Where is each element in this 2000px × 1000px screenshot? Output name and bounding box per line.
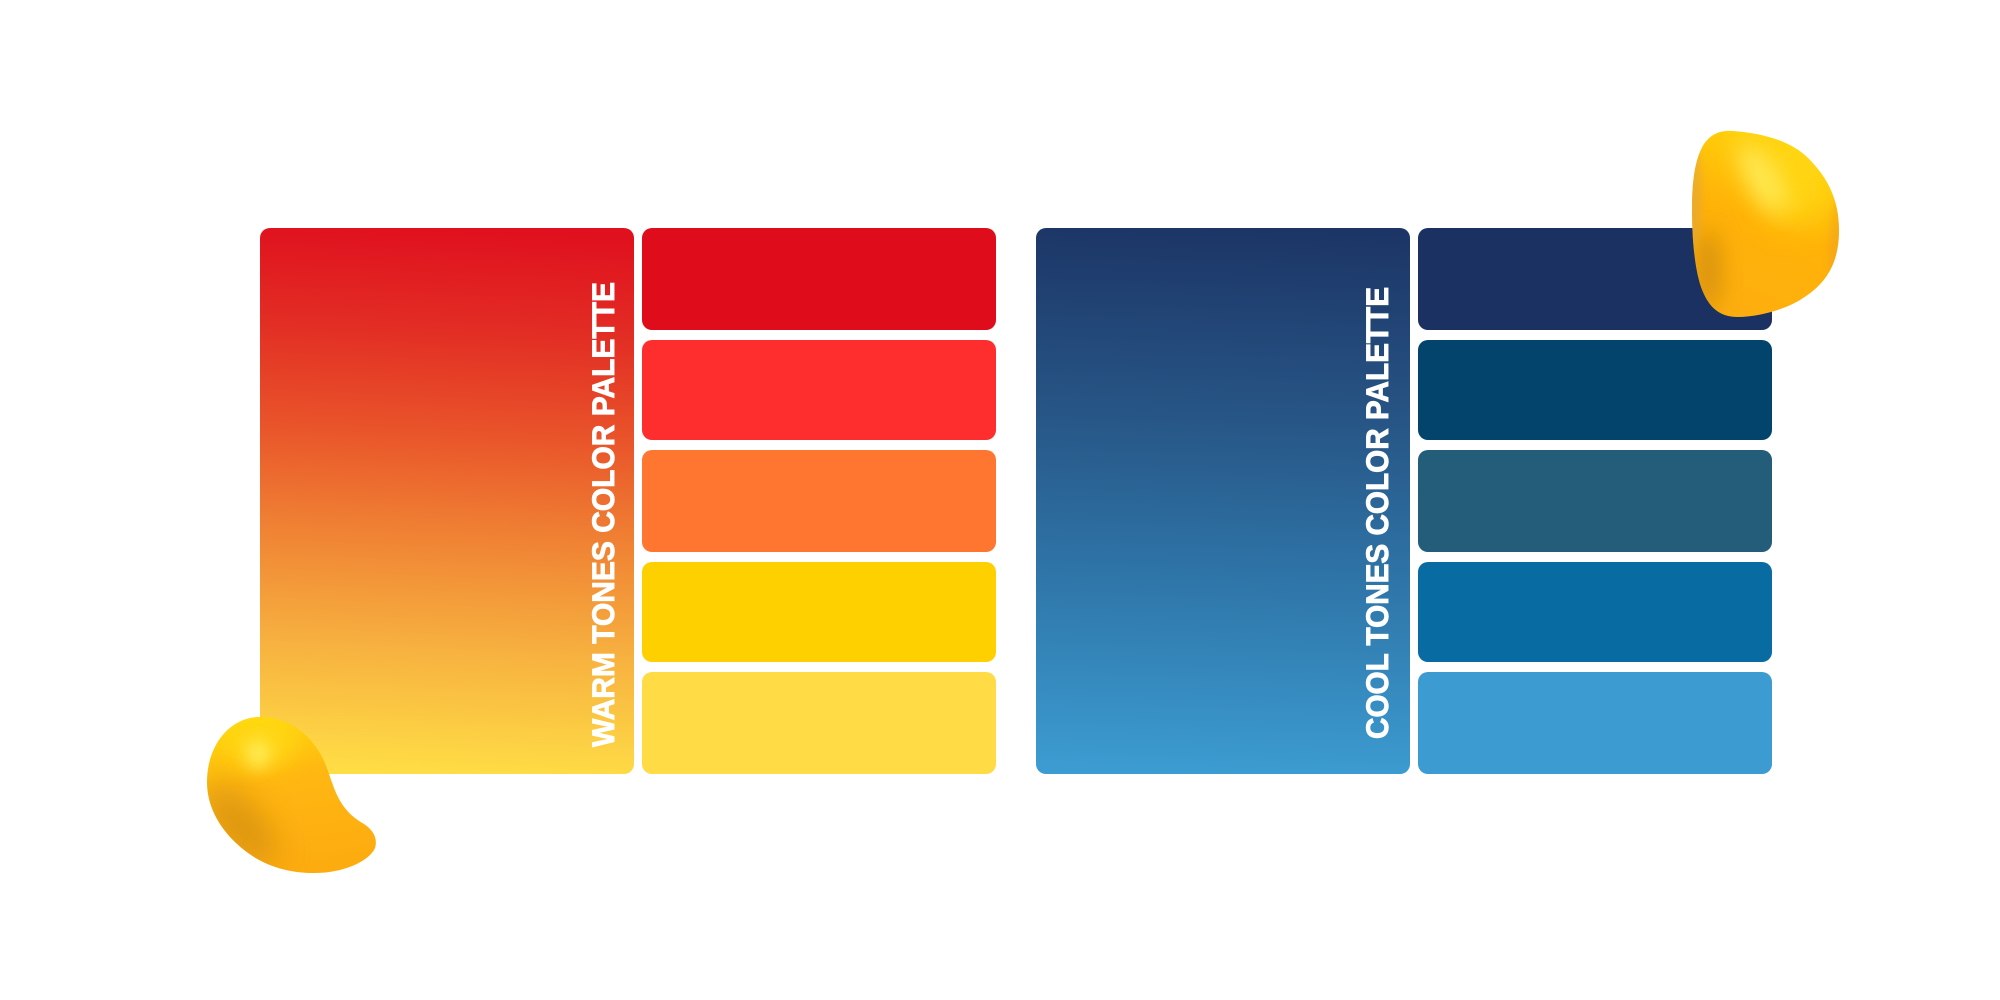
- swatch: sky blue: [1418, 672, 1772, 774]
- swatch: amber: [642, 562, 996, 662]
- swatch: bright red: [642, 340, 996, 440]
- heading: cool tones color palette: COOL TONES COLOR PALETTE: [1359, 287, 1395, 739]
- icon: yellow 3D droplet blob: [207, 717, 376, 873]
- swatch: slate teal: [1418, 450, 1772, 552]
- panel: warm tones gradient: [260, 228, 634, 774]
- swatch: ocean blue: [1418, 562, 1772, 662]
- swatch: yellow: [642, 672, 996, 774]
- panel: cool tones gradient: [1036, 228, 1410, 774]
- swatch: deep teal blue: [1418, 340, 1772, 440]
- swatch: red: [642, 228, 996, 330]
- warm swatches: [642, 228, 996, 774]
- icon: yellow 3D rounded blob: [1692, 130, 1839, 317]
- swatch: orange: [642, 450, 996, 552]
- cool swatches: [1418, 228, 1772, 774]
- swatch: navy: [1418, 228, 1772, 330]
- heading: warm tones color palette: WARM TONES COLOR PALETTE: [585, 282, 621, 747]
